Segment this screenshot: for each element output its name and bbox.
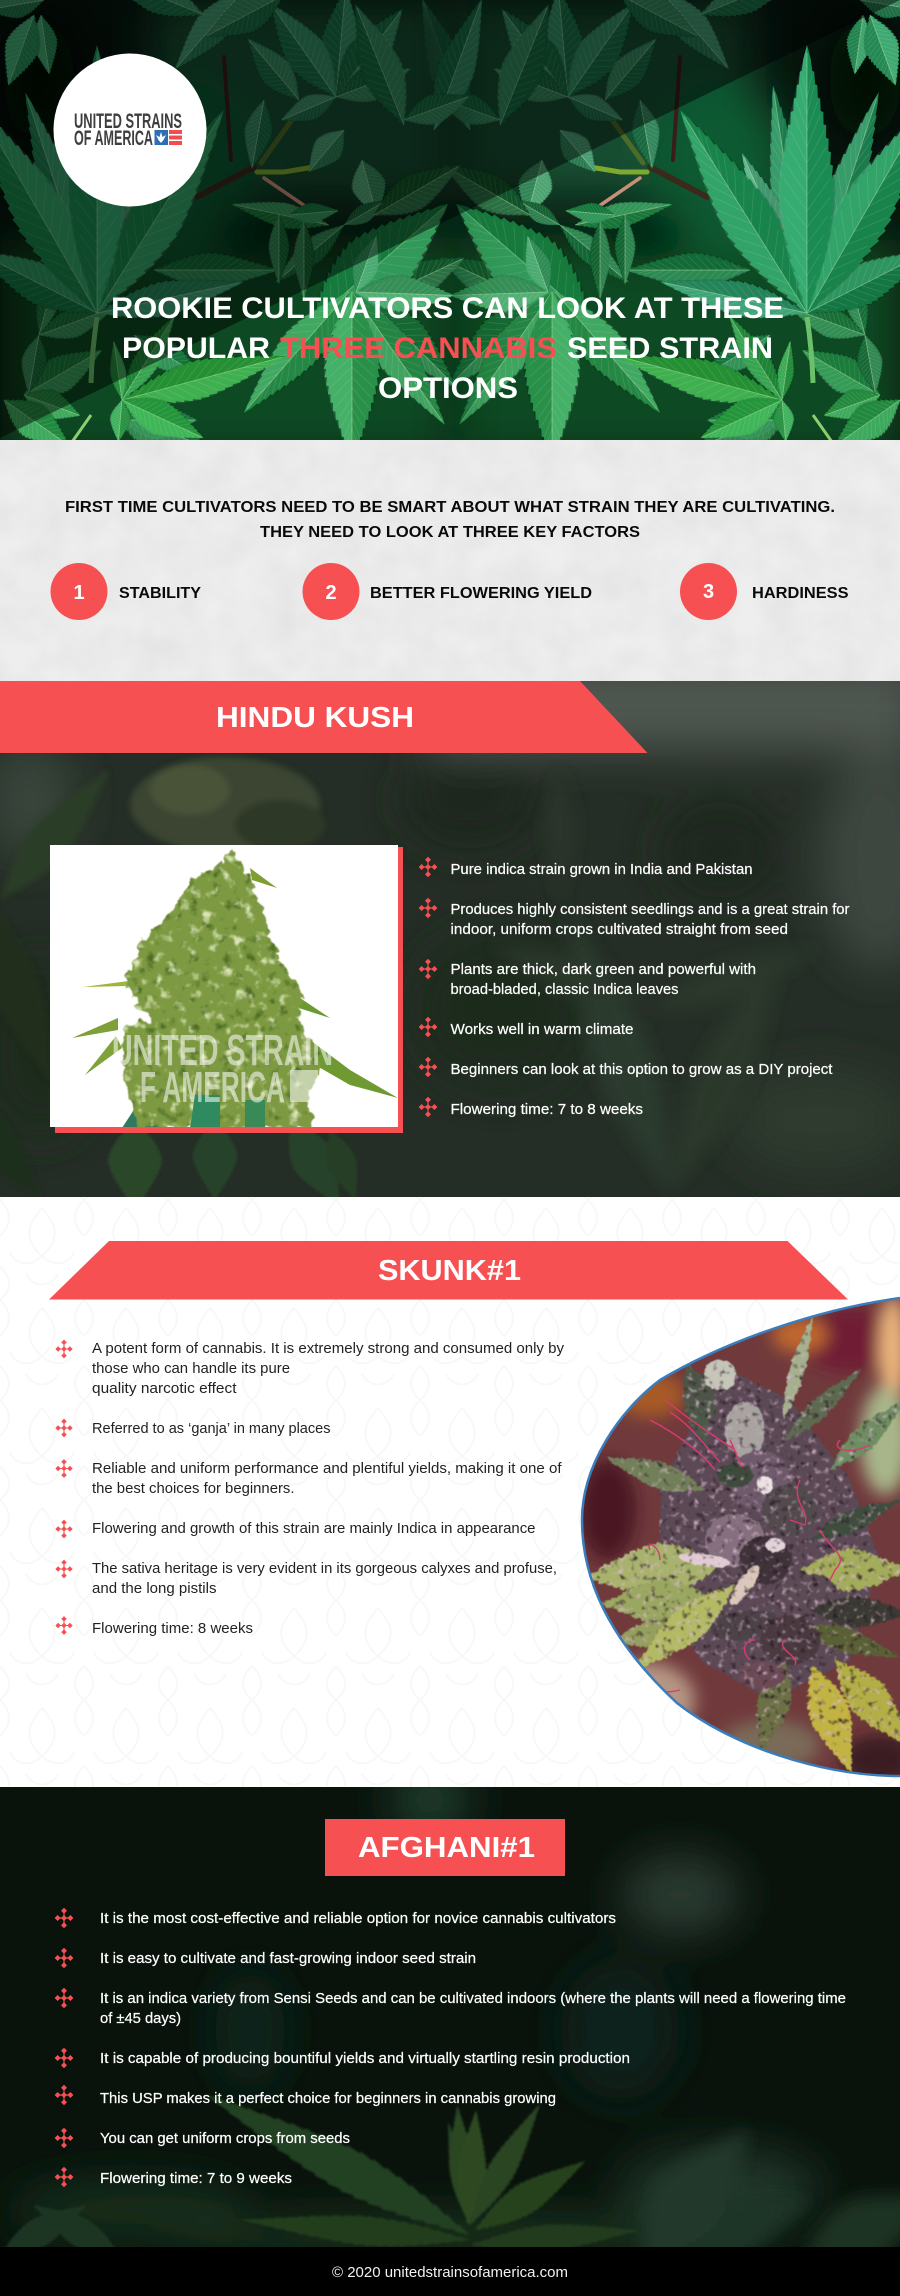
panel: hindu kush [0,660,900,1218]
intro text: THEY NEED TO LOOK AT THREE KEY FACTORS [260,524,640,541]
afghani bullet list: It is capable of producing bountiful yields and virtually startling resin production [100,2050,630,2067]
factor 2: better flowering yield [302,563,592,620]
hindu kush bullet list: Beginners can look at this option to grow as a DIY project [450,1061,833,1078]
afghani heading: AFGHANI#1 [358,1832,535,1864]
skunk bullet list [55,1340,564,1637]
skunk bullet list: quality narcotic effect [92,1380,237,1397]
afghani bullet list: It is the most cost-effective and reliable option for novice cannabis cultivators [100,1910,616,1927]
hero leaf photograph [0,0,900,469]
hindu kush bullet list [419,857,850,1118]
panel: afghani [0,1787,900,2247]
hindu kush blurred background [0,660,900,1218]
factor 1: stability: 1 [73,582,85,604]
factor 3: hardiness: 3 [703,581,714,603]
panel: skunk [49,1241,900,1778]
panel: key factors [0,440,900,681]
hindu kush bullet list: Flowering time: 7 to 8 weeks [450,1101,643,1118]
skunk bullet list: Reliable and uniform performance and plentiful yields, making it one of [92,1460,562,1477]
skunk strain photo [570,1290,900,1790]
hindu kush heading: HINDU KUSH [216,702,414,734]
intro text: FIRST TIME CULTIVATORS NEED TO BE SMART ABOUT WHAT STRAIN THEY ARE CULTIVATING. [65,499,835,516]
skunk heading [49,1241,848,1300]
logo badge [54,54,206,206]
skunk bullet list: The sativa heritage is very evident in its gorgeous calyxes and profuse, [92,1560,557,1577]
factor 2: better flowering yield: 2 [325,582,337,604]
hindu kush bullet list: broad-bladed, classic Indica leaves [450,981,678,998]
factor 1: stability: STABILITY [119,585,201,602]
hindu kush bullet list: Works well in warm climate [450,1021,634,1038]
logo badge: UNITED STRAINS [74,110,182,133]
photo watermark: F AMERICA [140,1063,285,1112]
intro text [65,499,835,541]
footer: © 2020 unitedstrainsofamerica.com [332,2264,568,2281]
hindu kush bullet list: Pure indica strain grown in India and Pakistan [450,861,752,878]
skunk bullet list: Flowering and growth of this strain are mainly Indica in appearance [92,1520,536,1537]
diagonal dark overlay [0,0,900,438]
factor 3: hardiness [680,563,849,620]
photo watermark: UNITED STRAIN [112,1026,333,1075]
skunk bullet list: Referred to as ‘ganja’ in many places [92,1420,330,1437]
afghani bullet list: Flowering time: 7 to 9 weeks [100,2170,292,2187]
factor 1: stability [50,563,201,620]
afghani bullet list [55,1908,846,2187]
afghani bullet list: It is easy to cultivate and fast-growing indoor seed strain [100,1950,476,1967]
hindu kush bullet list: Produces highly consistent seedlings and is a great strain for [450,901,850,918]
skunk bullet list: the best choices for beginners. [92,1480,294,1497]
hero banner [0,0,900,469]
hindu kush bullet list: Plants are thick, dark green and powerful with [450,961,756,978]
afghani bullet list: of ±45 days) [100,2010,181,2027]
skunk bullet list: those who can handle its pure [92,1360,290,1377]
logo badge: OF AMERICA [74,127,153,150]
afghani bullet list: You can get uniform crops from seeds [100,2130,350,2147]
factor 2: better flowering yield: BETTER FLOWERING YIELD [370,585,592,602]
afghani heading [325,1819,565,1876]
skunk bullet list: A potent form of cannabis. It is extremely strong and consumed only by [92,1340,564,1357]
hindu kush heading [0,681,648,753]
afghani bullet list: It is an indica variety from Sensi Seeds and can be cultivated indoors (where the plants will need a flowering time [100,1990,846,2007]
main title: POPULAR [122,332,270,365]
main title: OPTIONS [378,372,518,405]
photo watermark [114,1034,332,1102]
main title: THREE CANNABIS [280,332,557,365]
hindu kush bullet list: indoor, uniform crops cultivated straight from seed [450,921,788,938]
skunk bullet list: and the long pistils [92,1580,216,1597]
main title [113,297,783,398]
footer [0,2247,900,2296]
main title: SEED STRAIN [567,332,773,365]
afghani blurred background [0,1787,900,2247]
factor 3: hardiness: HARDINESS [752,585,849,602]
skunk heading: SKUNK#1 [378,1255,521,1287]
afghani bullet list: This USP makes it a perfect choice for beginners in cannabis growing [100,2090,556,2107]
hindu kush strain photo [50,845,403,1133]
main title: ROOKIE CULTIVATORS CAN LOOK AT THESE [111,292,784,325]
skunk bullet list: Flowering time: 8 weeks [92,1620,253,1637]
